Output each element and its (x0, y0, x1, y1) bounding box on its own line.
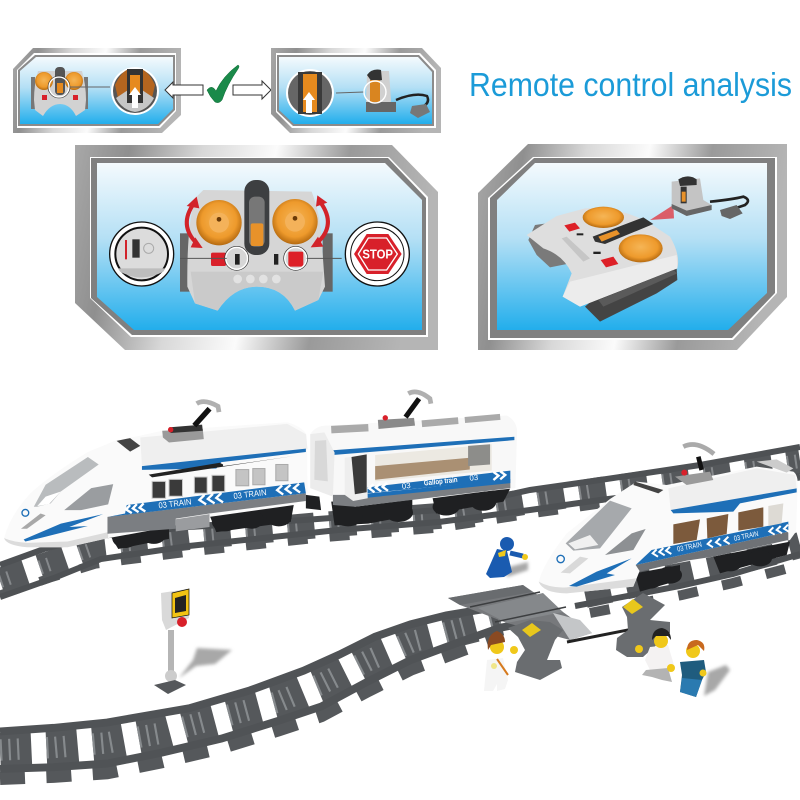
track: lower curved (0, 605, 536, 779)
pantograph (162, 402, 219, 443)
icon: lever callout (286, 69, 334, 117)
wheels (108, 503, 294, 549)
label: 03 TRAIN: 03 TRAIN (676, 540, 703, 554)
panel: small remote (13, 48, 181, 133)
sign post (154, 589, 232, 694)
door (345, 454, 368, 501)
shadow (179, 648, 232, 678)
figure: woman in white (635, 628, 675, 682)
level crossing barrier (508, 593, 670, 680)
rail (0, 621, 536, 769)
crossing plate (448, 585, 592, 640)
icon: check mark (207, 65, 239, 103)
panel: remote perspective view (478, 144, 787, 350)
side window (64, 484, 113, 510)
icon: stop sign callout (345, 222, 409, 286)
windows (673, 503, 783, 544)
left barrier post (508, 620, 563, 680)
figure: scientist (484, 631, 518, 691)
rail (0, 605, 518, 731)
windshield (566, 501, 632, 551)
icon: receiver (672, 176, 748, 219)
rail (0, 447, 800, 565)
nose flames (22, 509, 103, 542)
chevrons (369, 471, 505, 492)
nose flames (569, 558, 632, 587)
train: two carriages (4, 392, 517, 549)
panel: remote front view (75, 145, 438, 350)
pantograph (675, 445, 714, 485)
side window (605, 529, 646, 555)
pantograph (378, 392, 431, 429)
label: 03: 03 (401, 481, 411, 491)
icon: switch callout (110, 222, 174, 286)
figure: man in blue jacket (680, 640, 730, 697)
train: right locomotive (539, 445, 798, 593)
icon: remote mini (31, 67, 110, 116)
label: Gallop train: Gallop train (423, 475, 458, 487)
label: 03 TRAIN: 03 TRAIN (158, 496, 192, 510)
icon: stop sign callout: STOP (362, 247, 393, 262)
arrow: right wheel rotation (311, 195, 328, 247)
figure: conductor (486, 537, 528, 578)
icon: remote control (180, 180, 333, 311)
icon: remote control perspective (527, 207, 678, 322)
arrow: right (233, 81, 271, 99)
track: right lower (575, 545, 800, 613)
panel: small receiver (271, 48, 441, 133)
carriage: second car (306, 392, 517, 526)
icon: infrared beam (650, 205, 674, 220)
windshield (34, 457, 99, 507)
windows (152, 464, 288, 498)
right barrier post (616, 593, 670, 657)
carriage: lead car (4, 402, 308, 549)
rail (0, 476, 800, 597)
arrow: left (165, 82, 203, 98)
rail (575, 554, 800, 606)
track: upper straight (0, 447, 800, 597)
chevrons (126, 484, 300, 513)
label: 03 TRAIN: 03 TRAIN (733, 529, 759, 543)
label: 03 TRAIN: 03 TRAIN (233, 487, 267, 501)
label: 03: 03 (469, 473, 479, 483)
chevrons (653, 525, 789, 557)
stripe (142, 449, 306, 470)
arrow: left wheel rotation (187, 197, 203, 248)
icon: lever callout (111, 67, 159, 115)
windows (375, 444, 492, 481)
icon: receiver (364, 70, 430, 118)
